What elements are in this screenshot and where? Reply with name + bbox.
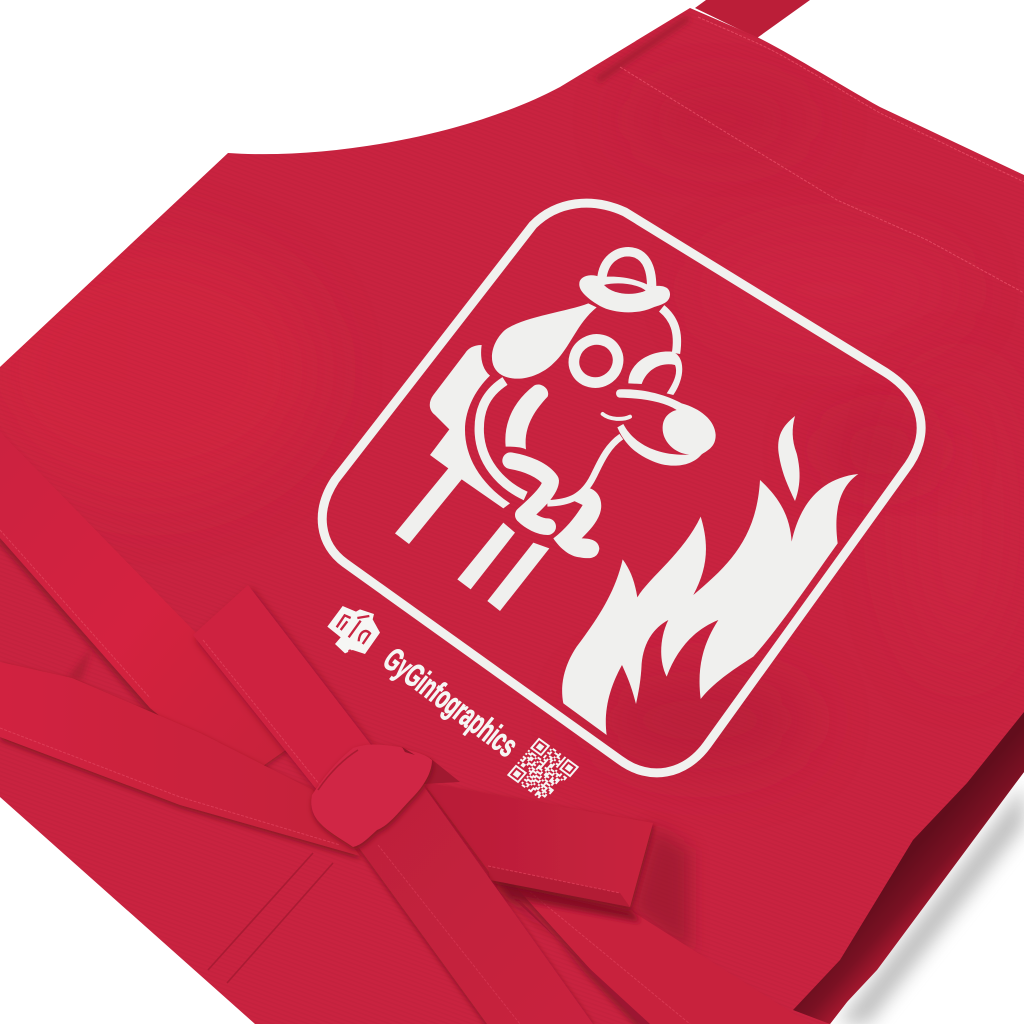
icon: dog sitting on chair with hat — [395, 252, 716, 611]
finder squares — [508, 739, 578, 803]
icon: flames — [562, 416, 858, 735]
apron tie: long band from left — [0, 432, 300, 782]
small flame — [778, 416, 800, 501]
crease on apron under tie band — [67, 647, 92, 680]
dog ear — [492, 303, 597, 379]
drop shadow under apron — [838, 785, 1024, 1024]
tie knot — [311, 744, 432, 847]
dog rear leg — [553, 488, 601, 558]
chair back and first leg — [395, 345, 510, 544]
apron tie: long band down from knot — [357, 785, 593, 1024]
dog right eye — [628, 352, 682, 395]
chair leg three — [487, 543, 549, 611]
dog smile — [603, 414, 630, 419]
lower apron hem seam — [208, 853, 333, 983]
QR code — [508, 738, 578, 803]
chair leg two — [457, 523, 515, 589]
dog left eye — [566, 331, 626, 391]
dog chest line — [547, 437, 621, 503]
knot dark fold — [423, 758, 460, 784]
dog head back line — [662, 308, 677, 353]
dog back curve — [479, 381, 526, 496]
apron tie: second long band to lower right — [490, 875, 810, 1024]
bib seam stitching — [620, 17, 1024, 293]
dog front leg — [511, 461, 551, 527]
printed badge frame — [322, 203, 921, 773]
brand logo mark — [327, 606, 380, 654]
hat brim slit — [604, 283, 646, 294]
apron tie: lower band from left — [0, 662, 360, 856]
apron tie: upright short end — [193, 585, 375, 790]
shadow beside right tie end — [630, 825, 690, 955]
hat brim — [579, 275, 670, 312]
dog arm — [505, 384, 548, 449]
hat dome — [602, 252, 652, 287]
dog snout and nose — [616, 389, 716, 466]
neck strap — [695, 0, 810, 38]
brand name: GyGinfographics — [377, 641, 525, 764]
data modules — [508, 738, 577, 802]
apron tie: right end — [423, 782, 653, 907]
folded side of apron — [793, 712, 1024, 1024]
main flame — [562, 474, 858, 735]
